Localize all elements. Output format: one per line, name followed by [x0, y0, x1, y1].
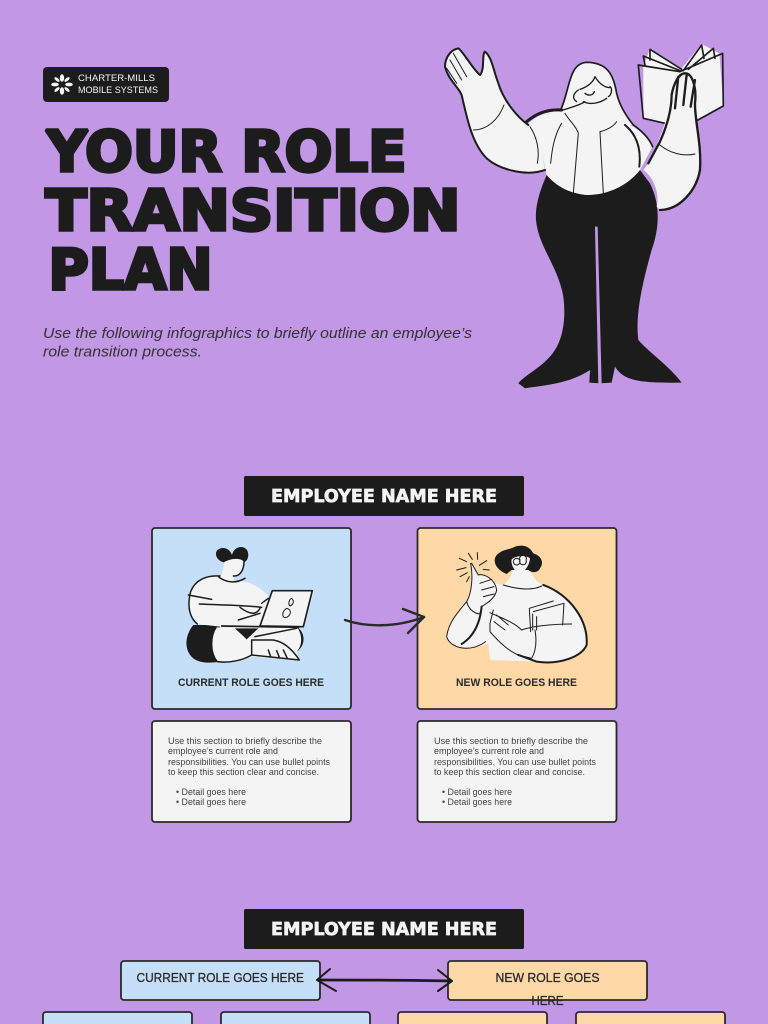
subtitle: Use the following infographics to briefly outline an employee’s [43, 325, 473, 342]
title [45, 120, 460, 303]
legs [212, 627, 301, 662]
title: YOUR ROLE [45, 120, 407, 185]
panel: current role description: to keep this section clear and concise. [168, 767, 319, 777]
title: TRANSITION [46, 179, 460, 244]
box: current role [121, 961, 320, 1000]
box: new role [448, 961, 647, 1008]
panel: new role description: • Detail goes here [442, 787, 512, 797]
head [220, 559, 244, 582]
line work [447, 553, 587, 662]
section one heading banner: EMPLOYEE NAME HERE [271, 486, 497, 507]
body [447, 567, 587, 662]
right arm and hand [643, 73, 700, 210]
section one heading banner [244, 476, 524, 516]
book [638, 44, 723, 123]
panel: current role description: employee’s current role and [168, 746, 278, 756]
panel: current role description: Use this section to briefly describe the [168, 736, 322, 746]
row of lower boxes [43, 1012, 725, 1024]
logo text: CHARTER-MILLS [78, 73, 155, 84]
illustration: person with laptop [186, 547, 314, 663]
icon: flower logo [51, 74, 73, 95]
section two heading banner [244, 909, 524, 949]
panel: new role description [418, 721, 616, 822]
hair [561, 62, 633, 125]
panel: new role description: Use this section to briefly describe the [434, 736, 588, 746]
line work [188, 562, 312, 662]
panel: current role description: responsibilities. You can use bullet points [168, 757, 330, 767]
subtitle: role transition process. [43, 344, 202, 360]
figure line work [445, 48, 700, 210]
panel: current role description: • Detail goes here [176, 787, 246, 797]
black shorts [186, 625, 304, 663]
label: new role: NEW ROLE GOES HERE [456, 677, 577, 689]
illustration: person with books [447, 546, 587, 662]
laptop [260, 591, 314, 627]
logo text: MOBILE SYSTEMS [78, 85, 158, 96]
title: PLAN [48, 238, 212, 303]
subtitle [43, 325, 473, 360]
arrow: double-headed between roles [317, 969, 452, 991]
thumb-up hand [467, 563, 497, 614]
logo badge [43, 67, 169, 102]
section two heading banner: EMPLOYEE NAME HERE [271, 919, 497, 940]
label: current role: CURRENT ROLE GOES HERE [178, 677, 324, 689]
box: current role: CURRENT ROLE GOES HERE [136, 971, 304, 985]
panel: current role [152, 528, 351, 709]
panel: new role description: to keep this section clear and concise. [434, 767, 585, 777]
panel: new role description: responsibilities. You can use bullet points [434, 757, 596, 767]
pants [518, 170, 682, 388]
panel: new role [418, 528, 616, 709]
arrow: current to new role [345, 609, 424, 633]
panel: new role description: employee’s current role and [434, 746, 544, 756]
box: new role: NEW ROLE GOES [496, 971, 600, 985]
panel: new role description: • Detail goes here [442, 797, 512, 807]
hair [495, 546, 542, 574]
crotch shadow [235, 628, 258, 639]
left arm and hand [445, 48, 545, 173]
illustration: woman holding a book [445, 44, 723, 388]
hair buns [216, 547, 248, 562]
shirt [528, 111, 653, 195]
box: new role: HERE [532, 994, 564, 1008]
panel: current role description: • Detail goes here [176, 797, 246, 807]
face [511, 556, 530, 573]
logo text [78, 73, 158, 96]
panel: current role description [152, 721, 351, 822]
body [189, 576, 270, 627]
